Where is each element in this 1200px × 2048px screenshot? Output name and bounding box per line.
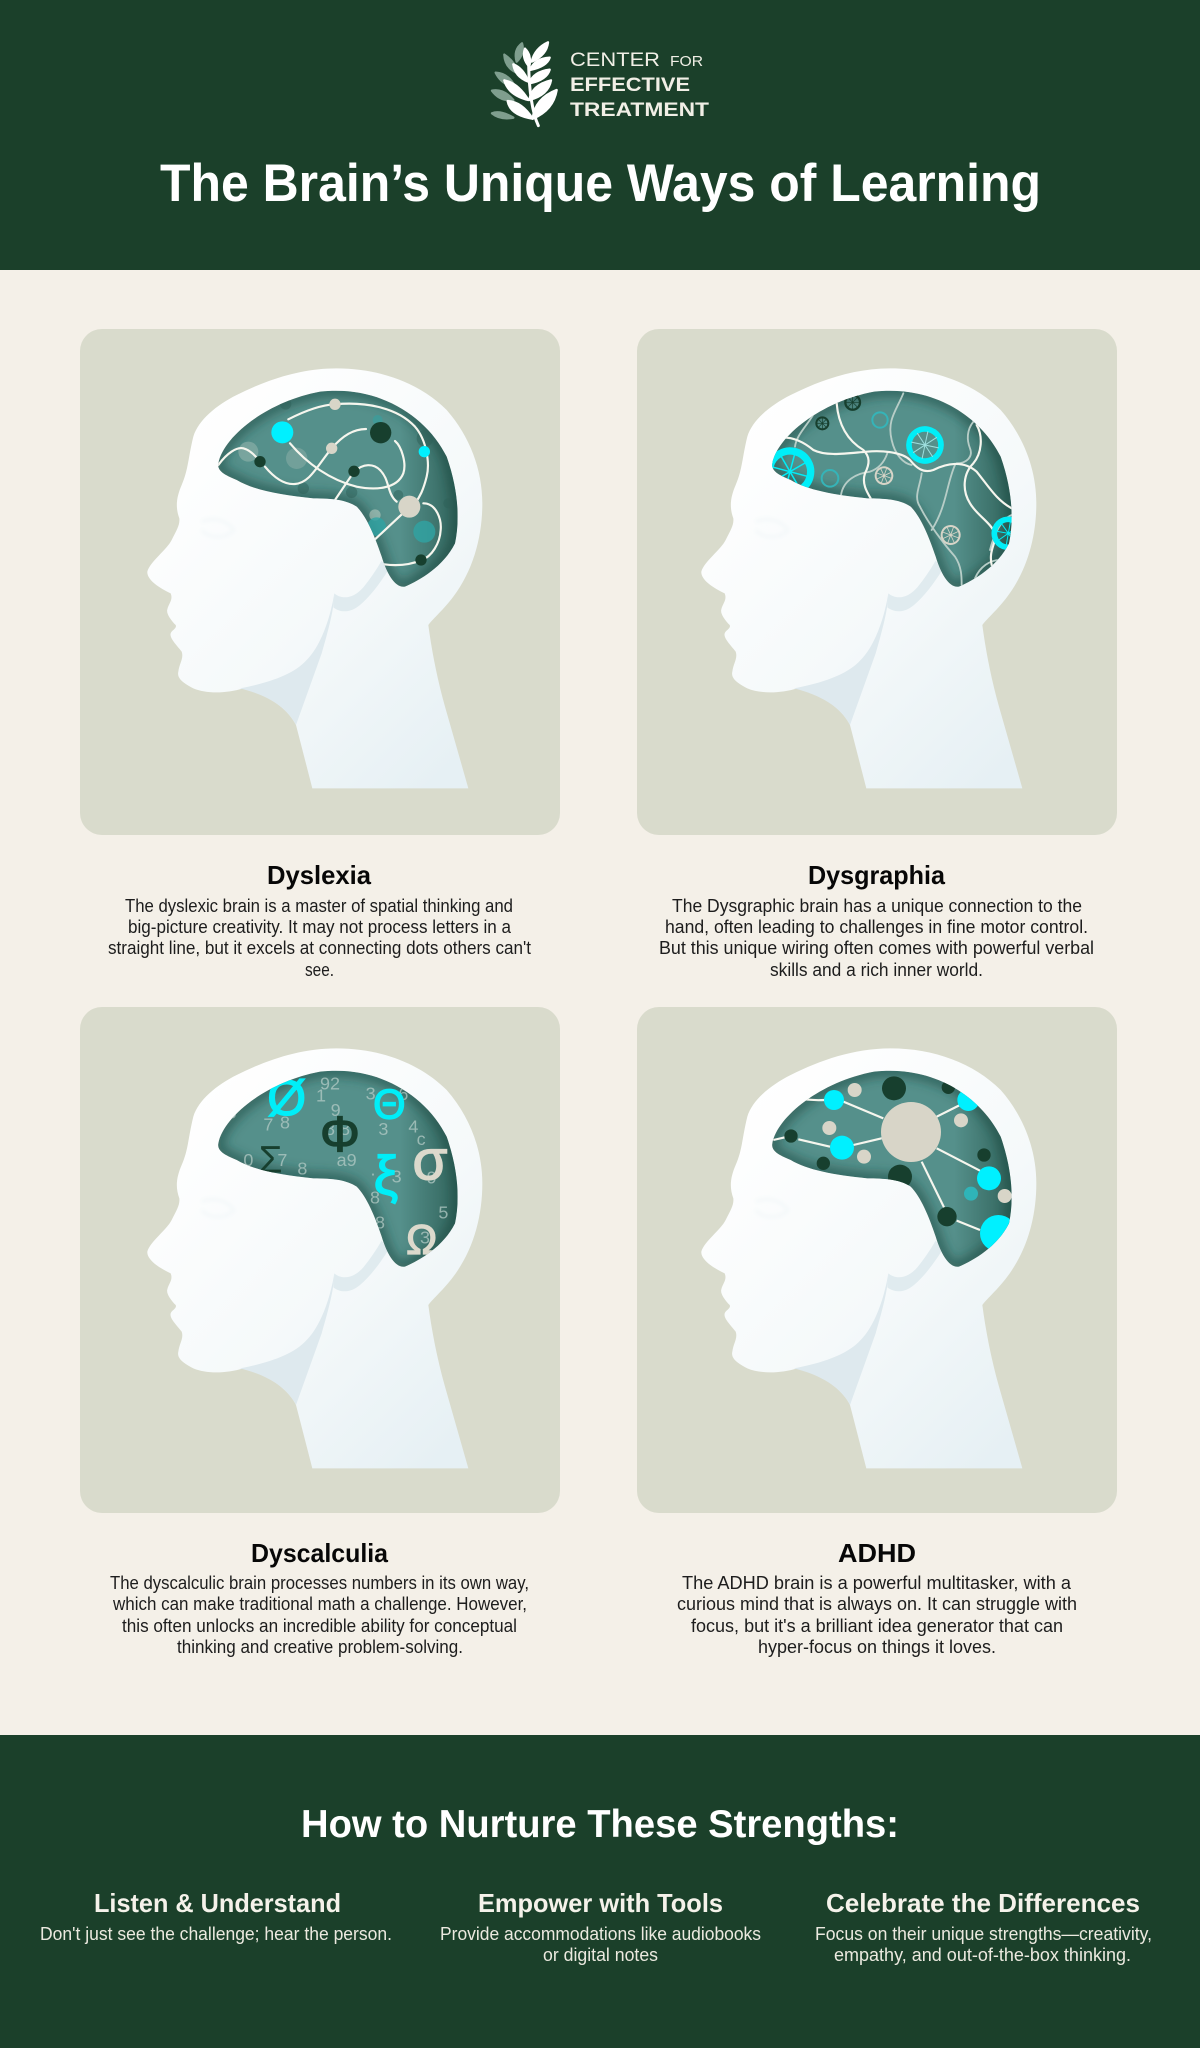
brain: floating numbers and symbols: 3 (420, 1227, 430, 1247)
adhd description: curious mind that is always on. It can struggle with (677, 1594, 1077, 1614)
adhd heading: ADHD (838, 1538, 916, 1568)
dyslexia description: see. (305, 960, 334, 980)
adhd description: The ADHD brain is a powerful multitasker, with a (682, 1573, 1072, 1593)
dysgraphia description: The Dysgraphic brain has a unique connection to the (672, 896, 1082, 916)
dyscalculia description: this often unlocks an incredible ability for conceptual (122, 1616, 517, 1636)
tip: empower with tools: Provide accommodations like audiobooks (440, 1924, 761, 1944)
tip: listen and understand (40, 1888, 392, 1944)
brain: winding pathways (218, 390, 463, 590)
icon: head (701, 1048, 1036, 1468)
adhd description (677, 1573, 1077, 1657)
brain: floating numbers and symbols: 5 (438, 1202, 448, 1222)
brain: floating numbers and symbols: Ø (267, 1070, 306, 1126)
dyslexia description: straight line, but it excels at connecting dots others can't (108, 938, 531, 958)
brain: floating numbers and symbols: 7 (263, 1115, 273, 1135)
dysgraphia description: hand, often leading to challenges in fine motor control. (665, 917, 1088, 937)
logo (492, 42, 709, 126)
brain: floating numbers and symbols: ξ (374, 1144, 398, 1206)
tip: empower with tools: or digital notes (543, 1945, 658, 1965)
panel: dysgraphia illustration (637, 329, 1117, 835)
brain: floating numbers and symbols: 8 (375, 1212, 385, 1232)
dyscalculia heading: Dyscalculia (251, 1538, 389, 1568)
brain: wheels and tangled wires (765, 390, 1025, 590)
dyslexia heading: Dyslexia (267, 860, 372, 890)
brain: floating numbers and symbols: 7 (277, 1150, 287, 1170)
panel: adhd illustration (637, 1007, 1117, 1513)
brain: floating numbers and symbols: 92 (320, 1073, 340, 1093)
dyscalculia description (110, 1573, 529, 1657)
tip: listen and understand: Listen & Understand (94, 1888, 341, 1918)
brain: floating numbers and symbols: 6 (398, 1084, 408, 1104)
brain: floating numbers and symbols: σ (413, 1129, 448, 1192)
brain: floating numbers and symbols: c (417, 1129, 426, 1149)
dyscalculia description: thinking and creative problem-solving. (177, 1637, 463, 1657)
tip: celebrate the differences: empathy, and out-of-the-box thinking. (834, 1945, 1131, 1965)
brain: floating numbers and symbols: Θ (373, 1080, 406, 1127)
logo wordmark (570, 50, 709, 121)
header band (0, 0, 1200, 270)
dyslexia description: The dyslexic brain is a master of spatial thinking and (125, 896, 513, 916)
dyscalculia description: The dyscalculic brain processes numbers in its own way, (110, 1573, 529, 1593)
logo wordmark: FOR (670, 53, 703, 70)
dysgraphia heading: Dysgraphia (808, 860, 946, 890)
brain: floating numbers and symbols: 8 (280, 1112, 290, 1132)
dysgraphia description: skills and a rich inner world. (770, 960, 983, 980)
brain: floating numbers and symbols: 8 (370, 1187, 380, 1207)
brain: floating numbers and symbols (218, 1070, 463, 1270)
brain: floating numbers and symbols: Φ (320, 1107, 360, 1163)
brain: floating numbers and symbols: 8 (297, 1158, 307, 1178)
icon: leaf branch (492, 42, 557, 126)
icon: head (701, 368, 1036, 788)
brain: floating numbers and symbols: · (370, 1163, 376, 1183)
brain: floating numbers and symbols: 0 (243, 1150, 253, 1170)
brain: floating numbers and symbols: 9 (331, 1100, 341, 1120)
brain: floating numbers and symbols: 9 (427, 1167, 437, 1187)
brain: floating numbers and symbols: 3 (378, 1119, 388, 1139)
adhd description: hyper-focus on things it loves. (758, 1637, 996, 1657)
icon: head (147, 368, 482, 788)
logo wordmark: TREATMENT (570, 100, 709, 121)
tip: empower with tools: Empower with Tools (478, 1888, 723, 1918)
brain: floating numbers and symbols: Σ (259, 1138, 283, 1181)
brain: floating numbers and symbols: 3 (366, 1083, 376, 1103)
footer band (0, 1735, 1200, 2048)
brain: floating numbers and symbols: 8 8 (325, 1119, 350, 1139)
logo wordmark: CENTER (570, 50, 660, 71)
dysgraphia description: But this unique wiring often comes with powerful verbal (659, 938, 1094, 958)
panel: dyscalculia illustration (80, 1007, 560, 1513)
adhd description: focus, but it's a brilliant idea generator that can (691, 1616, 1063, 1636)
brain: floating numbers and symbols: Ω (406, 1216, 437, 1263)
brain: floating numbers and symbols: 3 (392, 1167, 402, 1187)
brain: floating numbers and symbols: a9 (337, 1150, 357, 1170)
brain: floating numbers and symbols: 1 (316, 1086, 326, 1106)
tip: celebrate the differences: Celebrate the Differences (826, 1888, 1140, 1918)
tip: listen and understand: Don't just see the challenge; hear the person. (40, 1924, 392, 1944)
tip: celebrate the differences (815, 1888, 1152, 1965)
brain: floating numbers and symbols: 4 (408, 1117, 418, 1137)
panel: dyslexia illustration (80, 329, 560, 835)
dyslexia description: big-picture creativity. It may not process letters in a (128, 917, 512, 937)
title: The Brain’s Unique Ways of Learning (160, 154, 1041, 213)
brain: floating numbers and symbols: 5 (227, 1102, 237, 1122)
logo wordmark: EFFECTIVE (570, 75, 690, 96)
footer heading: How to Nurture These Strengths: (301, 1803, 899, 1846)
brain: hub and spoke network (772, 1070, 1017, 1270)
dyslexia description (108, 896, 531, 980)
dysgraphia description (659, 896, 1094, 980)
icon: head (147, 1048, 482, 1468)
tip: empower with tools (440, 1888, 761, 1965)
dyscalculia description: which can make traditional math a challenge. However, (112, 1594, 527, 1614)
tip: celebrate the differences: Focus on their unique strengths—creativity, (815, 1924, 1152, 1944)
